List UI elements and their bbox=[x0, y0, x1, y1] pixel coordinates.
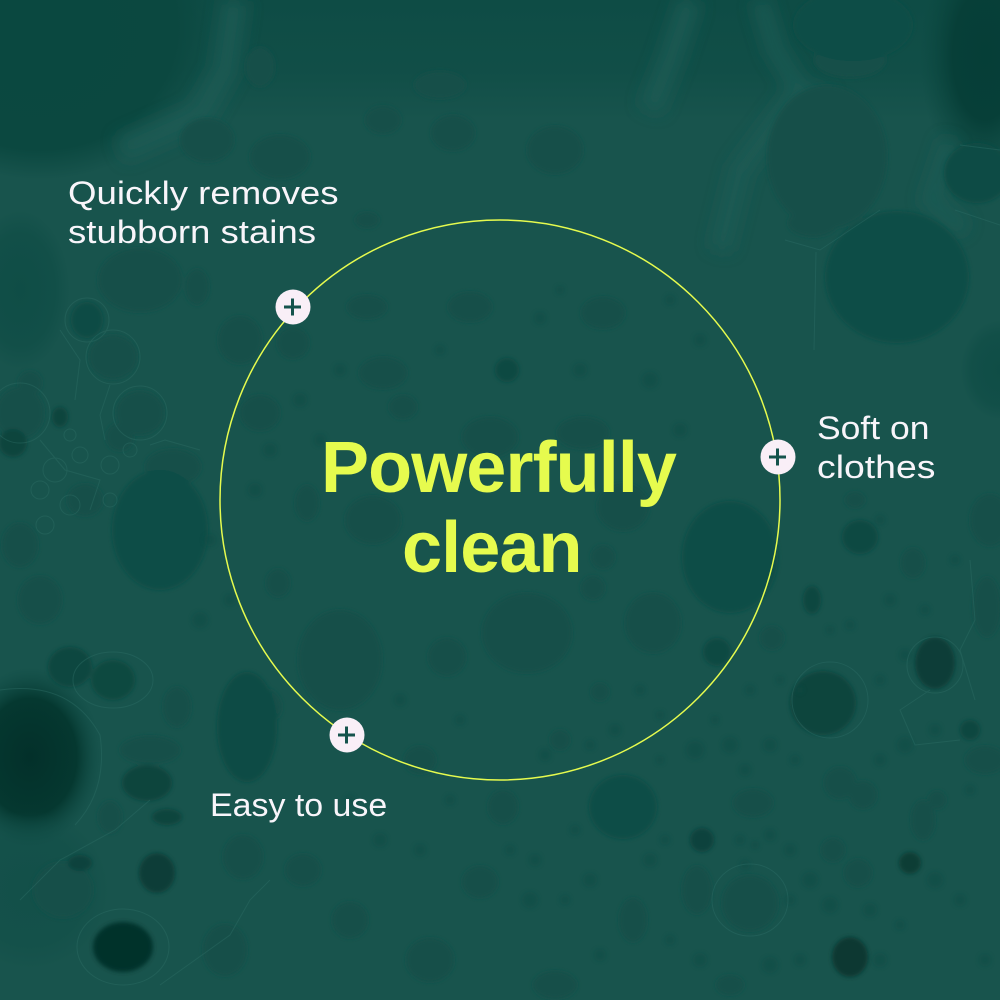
title: Powerfully clean: Powerfully bbox=[321, 428, 676, 508]
icon: plus marker right bbox=[760, 440, 796, 474]
callout: Soft on clothes: clothes bbox=[817, 449, 935, 485]
title: Powerfully clean: clean bbox=[402, 508, 582, 588]
title: Powerfully clean bbox=[321, 428, 676, 588]
callout: Quickly removes stubborn stains: stubborn stains bbox=[68, 214, 316, 250]
callout: Quickly removes stubborn stains: Quickly removes bbox=[68, 175, 339, 211]
callout: Soft on clothes: Soft on bbox=[817, 410, 929, 446]
callout: Easy to use: Easy to use bbox=[210, 787, 387, 823]
icon: plus marker top left bbox=[276, 290, 310, 324]
callout: Quickly removes stubborn stains bbox=[68, 175, 339, 250]
callout: Soft on clothes bbox=[817, 410, 935, 485]
icon: plus marker bottom left bbox=[330, 718, 364, 752]
